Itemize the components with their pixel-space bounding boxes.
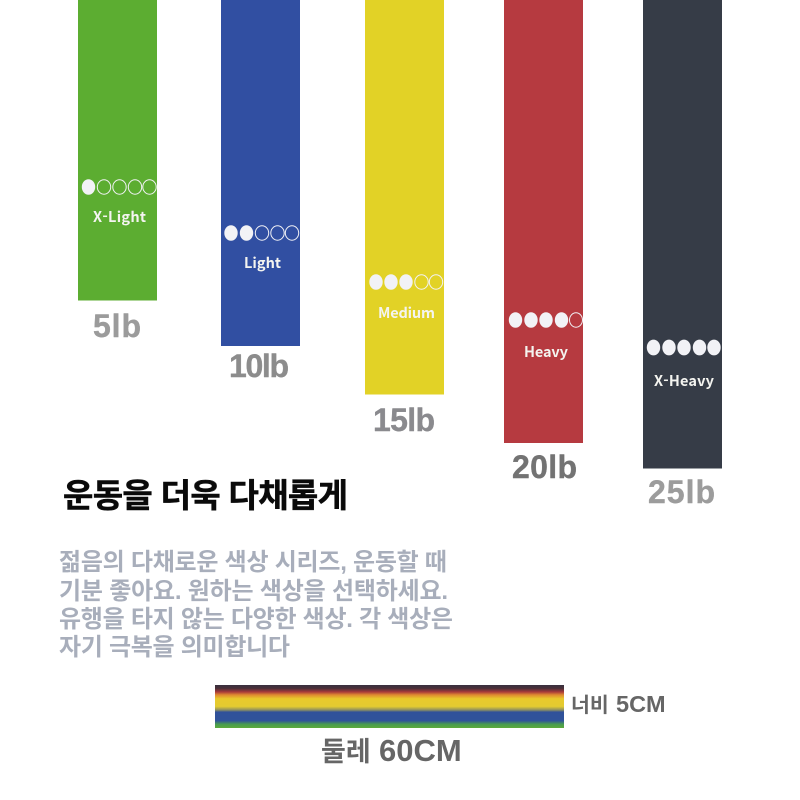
band: Medium 15lb yellow: [365, 0, 444, 438]
level label: Medium: Medium: [378, 302, 435, 323]
weight label: 15lb: 15lb: [373, 402, 435, 438]
width label: 5CM: [616, 691, 666, 717]
title: 운동을 더욱 다채롭게: [63, 477, 348, 514]
circumference label: 둘레: [321, 737, 371, 767]
weight label: 10lb: 10lb: [229, 348, 289, 384]
level label: X-Light: X-Light: [93, 206, 146, 227]
rainbow band with size labels: [215, 685, 666, 768]
weight label: 20lb: 20lb: [512, 449, 577, 485]
width label: 너비: [571, 694, 609, 717]
weight label: 25lb: 25lb: [648, 474, 715, 510]
band: Heavy 20lb red: [504, 0, 583, 485]
description text: 기분 좋아요. 원하는 색상을 선택하세요.: [59, 578, 448, 605]
resistance dots: 4 of 5: [509, 312, 582, 328]
weight label: 5lb: 5lb: [93, 308, 141, 344]
rainbow band swatch: [215, 685, 564, 728]
band: Light 10lb blue: [221, 0, 300, 384]
description text: 젊음의 다채로운 색상 시리즈, 운동할 때: [59, 549, 447, 576]
resistance dots: 5 of 5: [647, 340, 721, 355]
level label: Heavy: Heavy: [524, 341, 569, 362]
band: X-Heavy 25lb charcoal: [643, 0, 722, 510]
description text: 유행을 타지 않는 다양한 색상. 각 색상은: [59, 606, 453, 633]
level label: X-Heavy: X-Heavy: [654, 370, 715, 391]
resistance dots: 1 of 5: [82, 179, 156, 195]
band: X-Light 5lb green: [78, 0, 157, 344]
description text: 자기 극복을 의미합니다: [59, 634, 290, 661]
description text: [59, 549, 453, 661]
resistance dots: 2 of 5: [224, 225, 299, 241]
circumference label: 60CM: [379, 733, 462, 768]
level label: Light: Light: [244, 252, 281, 273]
resistance dots: 3 of 5: [369, 274, 443, 290]
